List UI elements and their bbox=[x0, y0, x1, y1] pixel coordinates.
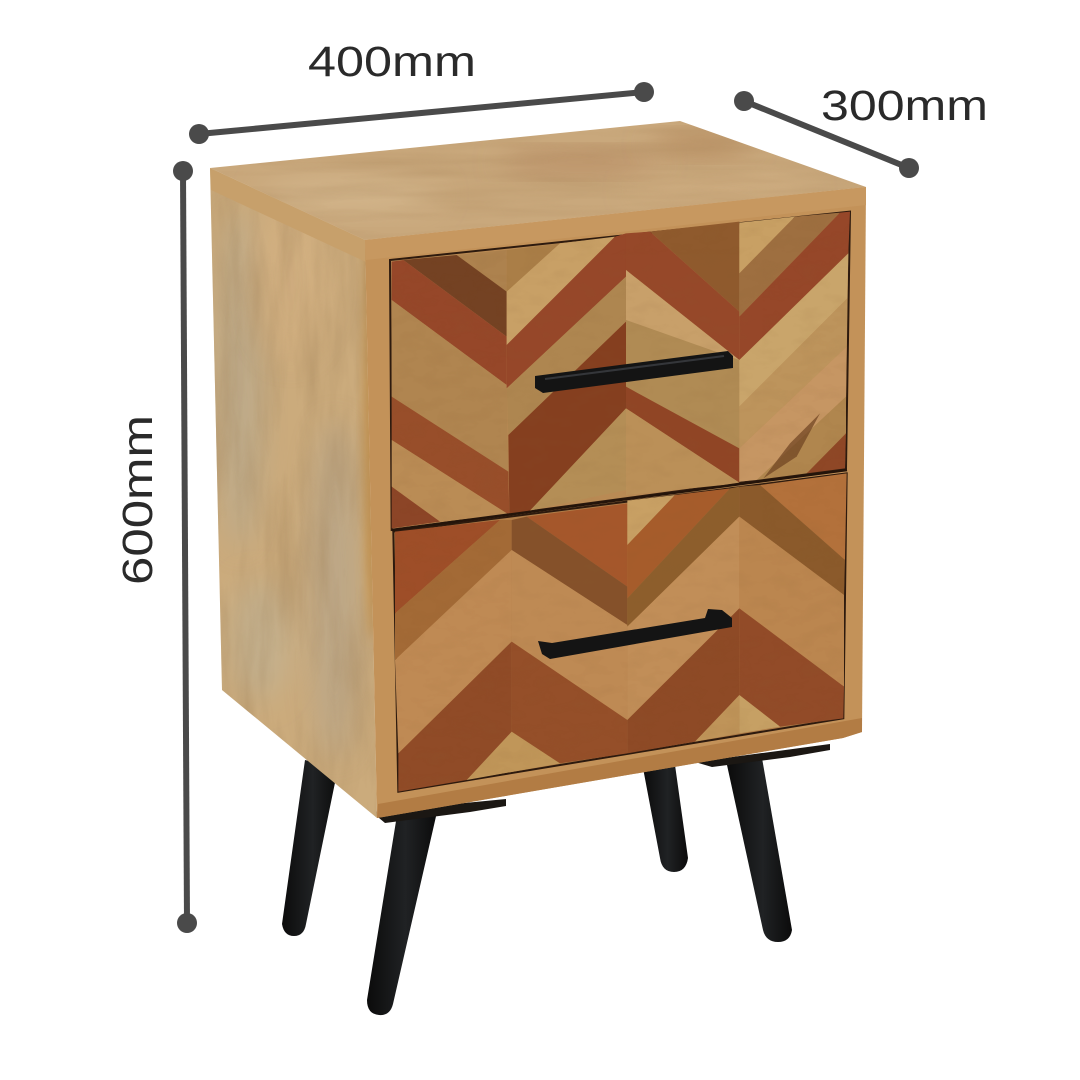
dimension: depth 300mm: 300mm bbox=[821, 82, 988, 130]
dimension: height 600mm bbox=[114, 161, 197, 933]
top drawer chevron column 1 bbox=[392, 250, 509, 528]
cabinet top surface bbox=[210, 121, 866, 240]
dimension: width 400mm bbox=[189, 38, 654, 144]
top drawer chevron column 2 bbox=[507, 233, 626, 514]
top drawer chevron column 4 bbox=[739, 212, 850, 482]
top drawer front bbox=[390, 212, 850, 530]
top drawer chevron column 3 bbox=[626, 222, 739, 495]
bottom drawer handle bbox=[538, 609, 732, 659]
dimension: depth 300mm bbox=[734, 82, 988, 178]
drawer wood grain texture bbox=[385, 205, 855, 795]
bottom drawer chevron column 1 bbox=[395, 520, 560, 792]
bottom drawer chevron column 3 bbox=[627, 487, 739, 753]
bottom drawer chevron column 4 bbox=[739, 473, 847, 733]
drawer gap line bbox=[392, 470, 847, 530]
infographic: cabinet with dimensions bbox=[122, 46, 985, 1016]
dimension: height 600mm: 600mm bbox=[114, 415, 162, 585]
cabinet legs bbox=[282, 758, 792, 1015]
bottom drawer chevron column 2 bbox=[512, 503, 627, 763]
cabinet side panel bbox=[210, 168, 377, 818]
mounting plates under cabinet bbox=[372, 744, 830, 823]
bottom drawer front bbox=[393, 473, 847, 792]
dimension: width 400mm: 400mm bbox=[308, 38, 476, 86]
cabinet front frame bbox=[365, 187, 866, 818]
top drawer handle bbox=[535, 351, 733, 393]
